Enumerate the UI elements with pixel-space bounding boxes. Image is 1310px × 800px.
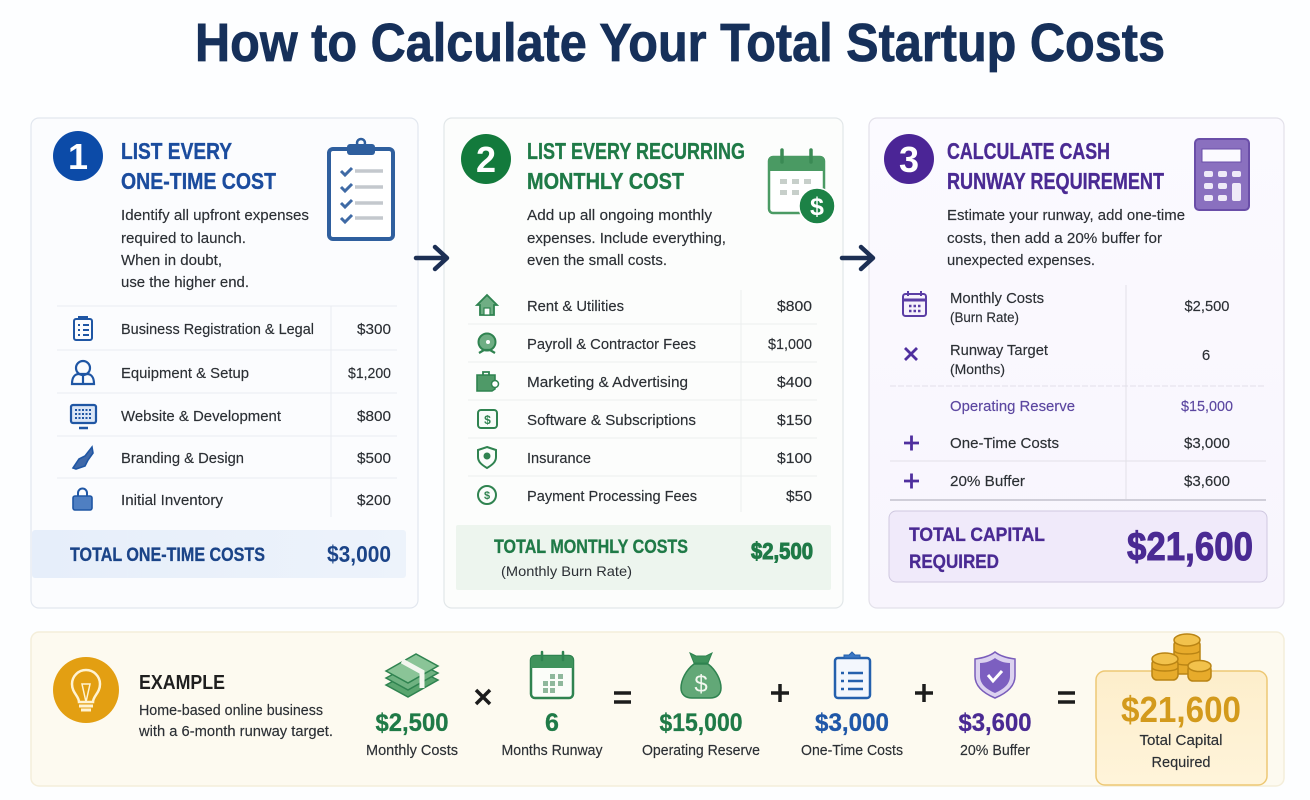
- step 1 description: required to launch.: [121, 230, 246, 247]
- item: months runway: 6: [545, 709, 559, 737]
- step 3 description: unexpected expenses.: [947, 252, 1095, 269]
- step 2 description: expenses. Include everything,: [527, 230, 726, 247]
- step 1 badge: 1: [68, 136, 88, 177]
- row: rent: [477, 295, 812, 315]
- row: rent: $800: [777, 298, 812, 315]
- row: payroll: $1,000: [768, 336, 812, 353]
- total: monthly costs: TOTAL MONTHLY COSTS: [494, 537, 688, 558]
- row: insurance: $100: [777, 450, 812, 467]
- result: total capital required: $21,600: [1121, 689, 1241, 730]
- item: operating reserve: [642, 653, 760, 759]
- arrow: step 2 to step 3: [842, 247, 873, 269]
- row: business registration: Business Registration & Legal: [121, 321, 314, 338]
- operator: equals: [614, 693, 631, 702]
- step 2 heading: [527, 138, 745, 194]
- row: marketing: $400: [777, 374, 812, 391]
- step 1 heading: LIST EVERY: [121, 138, 232, 164]
- item: 20% buffer: [958, 652, 1032, 759]
- row: software: $150: [777, 412, 812, 429]
- row: monthly costs: $2,500: [1184, 298, 1230, 315]
- row: inventory: $200: [357, 492, 391, 509]
- icon: gold coins: [1152, 634, 1211, 681]
- row: equipment: Equipment & Setup: [121, 365, 249, 382]
- row: payment processing: Payment Processing Fees: [527, 488, 697, 505]
- example intro: [138, 672, 333, 740]
- row: runway target: (Months): [950, 362, 1005, 377]
- item: 20% buffer: $3,600: [958, 709, 1032, 737]
- step 2 description: Add up all ongoing monthly: [527, 207, 713, 224]
- row: website: $800: [357, 408, 391, 425]
- step 2 heading: MONTHLY COST: [527, 168, 684, 194]
- step 3 description: [947, 207, 1185, 269]
- operator: plus: [915, 684, 933, 702]
- row: payment processing: [478, 486, 812, 505]
- row: monthly costs: (Burn Rate): [950, 310, 1019, 325]
- arrow: step 1 to step 2: [416, 247, 447, 269]
- step 3 heading: CALCULATE CASH: [947, 138, 1110, 164]
- row: runway target: Runway Target: [950, 342, 1049, 359]
- row: equipment: $1,200: [348, 365, 391, 382]
- panel: step 3 cash runway: [869, 118, 1284, 608]
- step 3 heading: RUNWAY REQUIREMENT: [947, 168, 1164, 194]
- row: insurance: [478, 447, 812, 468]
- step 2 description: [527, 207, 726, 269]
- row: monthly costs: [903, 290, 1230, 325]
- example intro: with a 6-month runway target.: [138, 724, 333, 740]
- step 2 badge: 2: [476, 139, 496, 180]
- step 1 heading: [121, 138, 276, 194]
- row: marketing: Marketing & Advertising: [527, 374, 688, 391]
- row: equipment: [72, 361, 391, 384]
- row: business registration: [74, 317, 391, 340]
- total: monthly costs: (Monthly Burn Rate): [501, 563, 632, 579]
- row: website: [71, 405, 391, 428]
- row: software: $: [484, 413, 491, 427]
- item: monthly costs: $2,500: [376, 709, 448, 737]
- row: 20% buffer: $3,600: [1184, 473, 1230, 490]
- total: capital required: TOTAL CAPITAL: [909, 525, 1045, 546]
- panel: step 2 monthly costs: [444, 118, 843, 608]
- icon: calendar with dollar: $: [810, 193, 824, 221]
- item: monthly costs: Monthly Costs: [366, 743, 458, 759]
- row: software: [478, 410, 812, 429]
- row: one-time costs: $3,000: [1184, 435, 1230, 452]
- row: operating reserve: [950, 398, 1233, 415]
- total: one-time costs: [32, 530, 406, 578]
- step 3 heading: [947, 138, 1164, 194]
- icon: light bulb: [53, 657, 119, 723]
- step 1 description: use the higher end.: [121, 274, 249, 291]
- row: branding: [73, 447, 391, 469]
- panel: example: [31, 632, 1284, 786]
- row: payment processing: $: [484, 490, 490, 502]
- total: monthly costs: $2,500: [751, 538, 813, 564]
- icon: calculator: [1195, 139, 1249, 210]
- row: branding: $500: [357, 450, 391, 467]
- icon: clipboard checklist: [329, 139, 393, 239]
- row: monthly costs: Monthly Costs: [950, 290, 1044, 307]
- item: operating reserve: Operating Reserve: [642, 743, 760, 759]
- item: one-time costs: [801, 652, 903, 759]
- step 1 heading: ONE-TIME COST: [121, 168, 276, 194]
- total: monthly costs: [456, 525, 831, 590]
- row: one-time costs: One-Time Costs: [950, 435, 1059, 452]
- row: rent: Rent & Utilities: [527, 298, 624, 315]
- row: operating reserve: $15,000: [1181, 398, 1233, 415]
- row: marketing: [477, 372, 812, 391]
- operator: times: [476, 690, 490, 704]
- item: 20% buffer: 20% Buffer: [960, 743, 1030, 759]
- item: monthly costs: [366, 654, 458, 759]
- row: software: Software & Subscriptions: [527, 412, 696, 429]
- icon: calendar with dollar: [769, 150, 835, 224]
- row: inventory: Initial Inventory: [121, 492, 223, 509]
- total: capital required: REQUIRED: [909, 552, 999, 573]
- item: one-time costs: One-Time Costs: [801, 743, 903, 759]
- step 2 badge: [461, 134, 511, 184]
- step 1 description: When in doubt,: [121, 252, 222, 269]
- row: payment processing: $50: [786, 488, 812, 505]
- result: total capital required: Required: [1152, 755, 1210, 771]
- row: insurance: Insurance: [527, 450, 591, 467]
- example intro: Home-based online business: [139, 703, 323, 719]
- total: capital required: [889, 511, 1267, 582]
- row: business registration: $300: [357, 321, 391, 338]
- row: one-time costs: [904, 435, 1230, 452]
- row: 20% buffer: [904, 473, 1230, 490]
- total: capital required: $21,600: [1127, 525, 1253, 569]
- item: operating reserve: $15,000: [660, 709, 742, 737]
- row: inventory: [73, 488, 391, 510]
- row: branding: Branding & Design: [121, 450, 244, 467]
- result: total capital required: [1096, 634, 1267, 785]
- step 3 badge: 3: [899, 139, 919, 180]
- row: operating reserve: Operating Reserve: [950, 398, 1075, 415]
- step 1 description: [121, 207, 309, 291]
- result: total capital required: Total Capital: [1140, 733, 1222, 749]
- row: payroll: Payroll & Contractor Fees: [527, 336, 696, 353]
- row: 20% buffer: 20% Buffer: [950, 473, 1025, 490]
- row: runway target: [905, 342, 1210, 377]
- item: months runway: Months Runway: [502, 743, 603, 759]
- total: one-time costs: $3,000: [327, 541, 391, 567]
- title: How to Calculate Your Total Startup Costs: [195, 13, 1165, 73]
- row: runway target: 6: [1202, 347, 1210, 364]
- item: operating reserve: $: [694, 671, 708, 698]
- step 2 heading: LIST EVERY RECURRING: [527, 138, 745, 164]
- item: months runway: [502, 652, 603, 759]
- example intro: EXAMPLE: [139, 672, 225, 694]
- operator: plus: [771, 684, 789, 702]
- step 1 description: Identify all upfront expenses: [121, 207, 309, 224]
- step 2 description: even the small costs.: [527, 252, 667, 269]
- step 3 description: Estimate your runway, add one-time: [947, 207, 1185, 224]
- row: payroll: [478, 334, 812, 353]
- step 1 badge: [53, 131, 103, 181]
- operator: equals: [1058, 693, 1075, 702]
- total: one-time costs: TOTAL ONE-TIME COSTS: [70, 545, 265, 566]
- panel: step 1 one-time costs: [31, 118, 418, 608]
- item: one-time costs: $3,000: [815, 709, 889, 737]
- step 3 description: costs, then add a 20% buffer for: [947, 230, 1162, 247]
- row: website: Website & Development: [121, 408, 282, 425]
- step 3 badge: [884, 134, 934, 184]
